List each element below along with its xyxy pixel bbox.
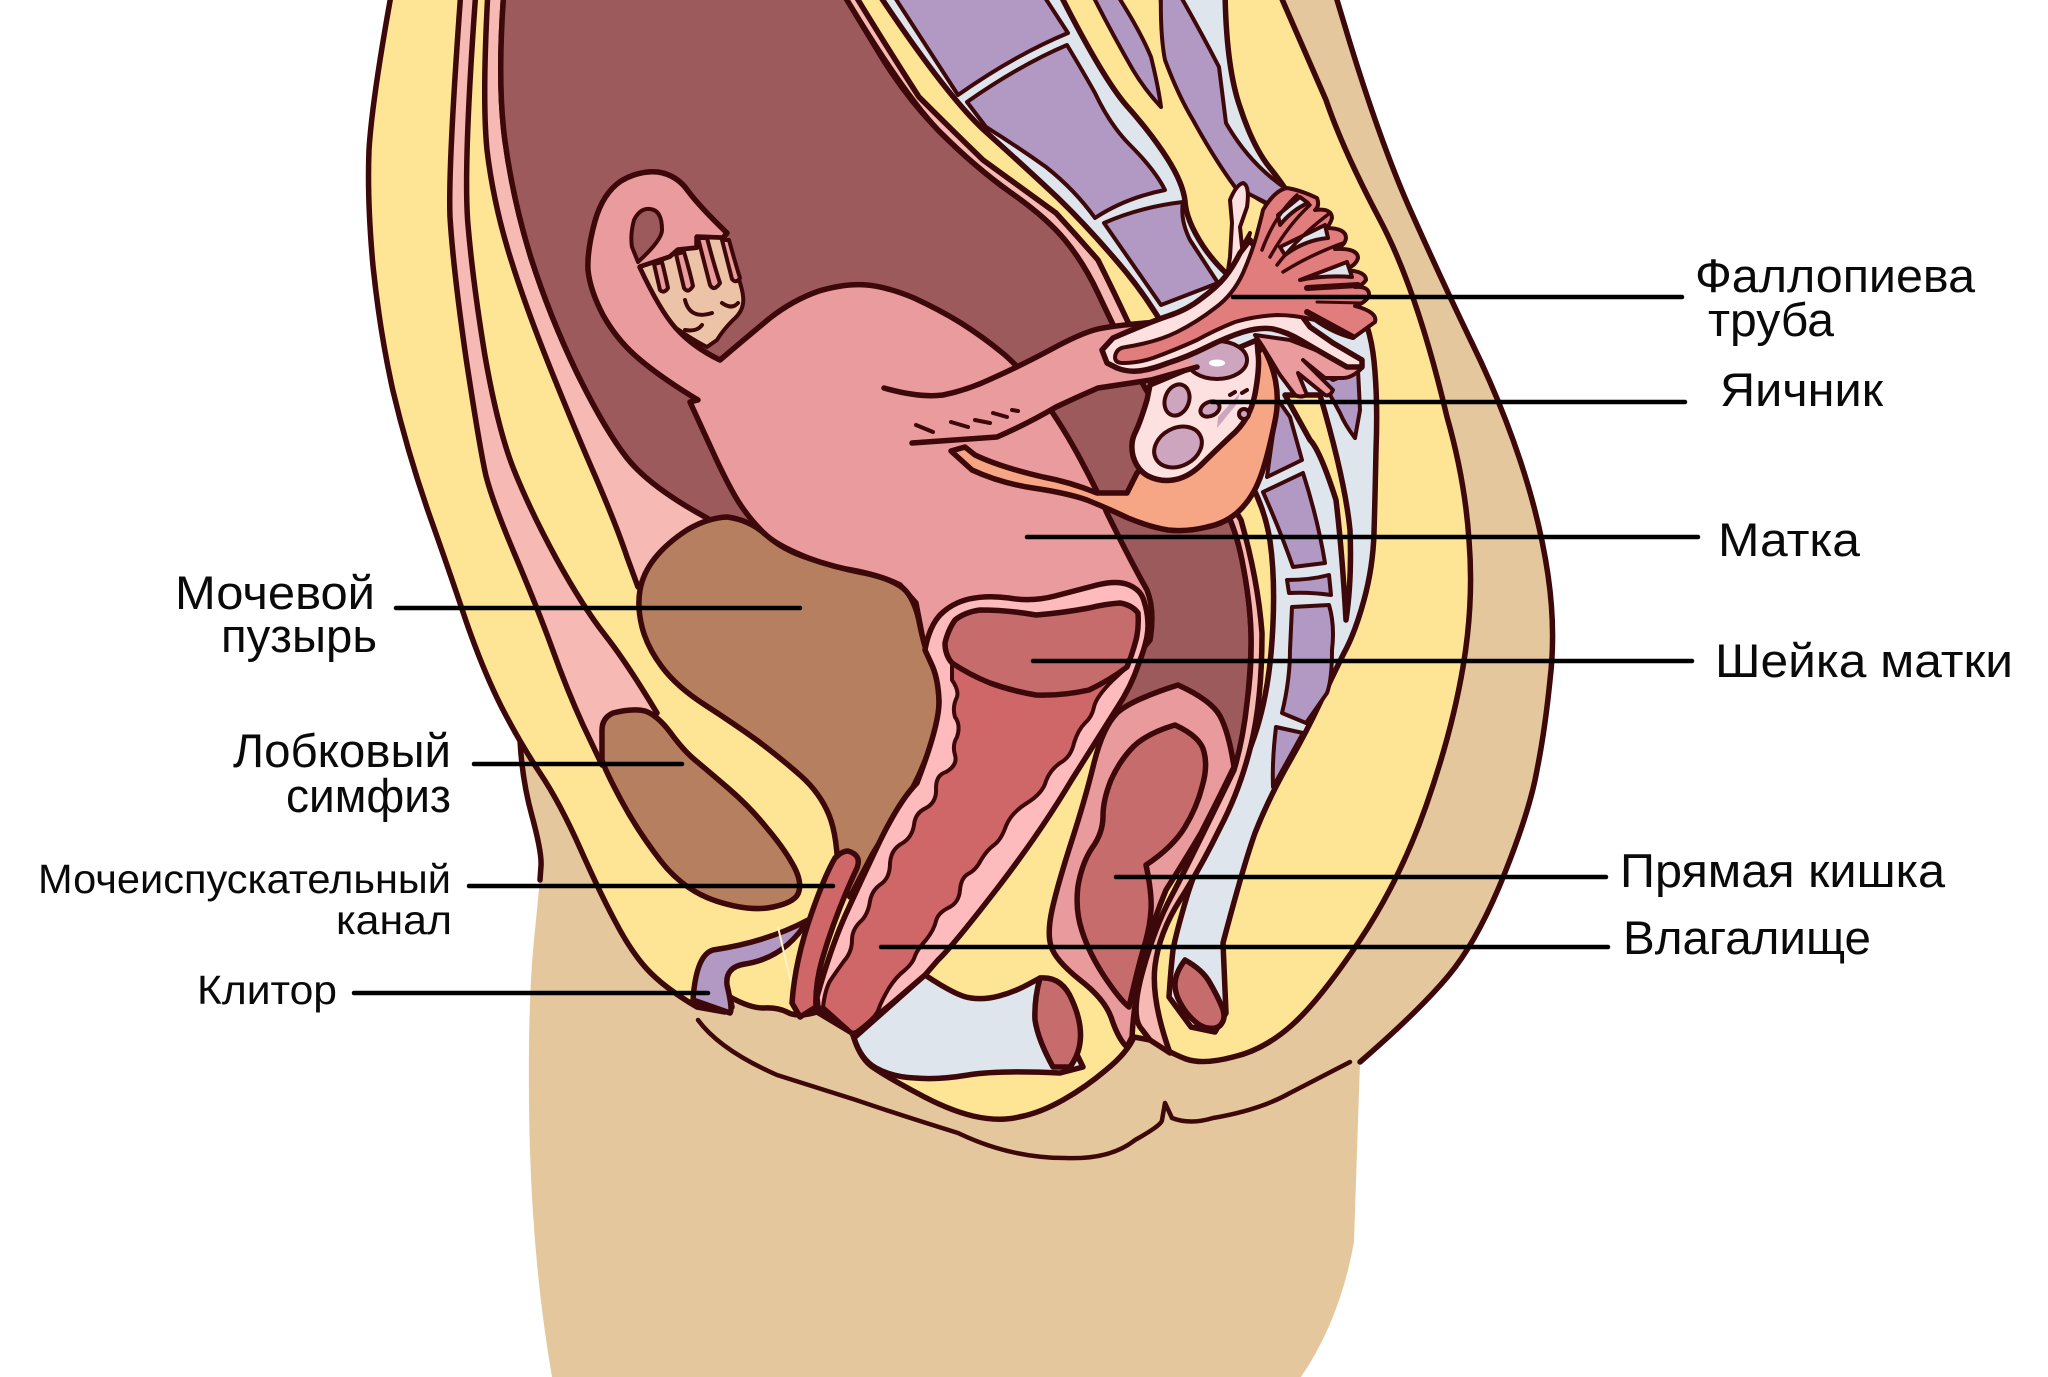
- rectum: [1049, 685, 1234, 1047]
- bladder: [639, 517, 939, 897]
- anus: [1175, 960, 1224, 1028]
- lower spinal fat strip: [1285, 395, 1350, 620]
- spinal column tissue: [876, 0, 1377, 1032]
- label: Лобковый симфиз: [233, 724, 682, 822]
- pale labial highlight: [778, 927, 795, 1000]
- rectum lumen: [1077, 725, 1206, 1007]
- body silhouette: [520, 0, 1553, 1377]
- urethra: [792, 851, 858, 1017]
- pubic symphysis: [602, 710, 800, 909]
- label: Яичник: Яичник: [1720, 363, 1883, 416]
- abdominal cavity: [501, 0, 1251, 770]
- cervix: [945, 603, 1138, 695]
- vertebrae: [890, 0, 1360, 787]
- left ovary with fimbriae: [640, 237, 743, 347]
- label: Фаллопиева труба: Фаллопиева: [1695, 249, 1976, 302]
- label: Мочеиспускательный канал: Мочеиспускательный: [38, 856, 451, 902]
- fimbriae and tube core: [1115, 188, 1375, 363]
- label: Фаллопиева труба: [1233, 249, 1976, 346]
- tube sheath lobe: [1227, 183, 1250, 277]
- subcutaneous fat layer: [368, 0, 1471, 1119]
- fat strip along the spine: [1058, 0, 1267, 292]
- label: Клитор: Клитор: [197, 967, 337, 1013]
- label: Мочевой пузырь: Мочевой: [175, 566, 375, 619]
- pelvic lining strip: [841, 0, 1262, 1053]
- label: Лобковый симфиз: симфиз: [286, 769, 451, 822]
- peritoneal lining band: [485, 0, 720, 600]
- ovarian follicles: [1147, 341, 1249, 476]
- label: Мочевой пузырь: пузырь: [221, 609, 377, 662]
- perineal connective tissue: [854, 975, 1083, 1079]
- vaginal wall: [817, 582, 1148, 1033]
- label: Прямая кишка: Прямая кишка: [1620, 844, 1946, 897]
- fallopian tube sheath: [1102, 240, 1362, 371]
- label: Фаллопиева труба: труба: [1708, 293, 1835, 346]
- anal canal: [1035, 978, 1081, 1067]
- label: Мочеиспускательный канал: [38, 856, 833, 943]
- uterus: [588, 172, 1152, 700]
- label: Матка: Матка: [1718, 513, 1861, 566]
- clitoris: [693, 920, 808, 1013]
- label: Влагалище: Влагалище: [1623, 911, 1871, 964]
- uterine tube loop opening: [631, 209, 662, 262]
- vaginal canal: [823, 663, 1127, 1033]
- tube hatch marks: [916, 410, 1018, 432]
- fimbrial grooves: [1262, 195, 1363, 337]
- ovarian ligament: [951, 347, 1277, 531]
- fallopian tube body: [884, 322, 1197, 443]
- abdominal wall muscle band: [450, 0, 657, 765]
- label: Лобковый симфиз: Лобковый: [233, 724, 451, 777]
- lower fimbriae: [1255, 335, 1362, 396]
- label: Мочевой пузырь: [175, 566, 800, 662]
- label: Мочеиспускательный канал: канал: [336, 897, 452, 943]
- label: Шейка матки: Шейка матки: [1715, 634, 2013, 687]
- gaps between fimbriae: [1300, 262, 1352, 280]
- right ovary: [1132, 340, 1259, 480]
